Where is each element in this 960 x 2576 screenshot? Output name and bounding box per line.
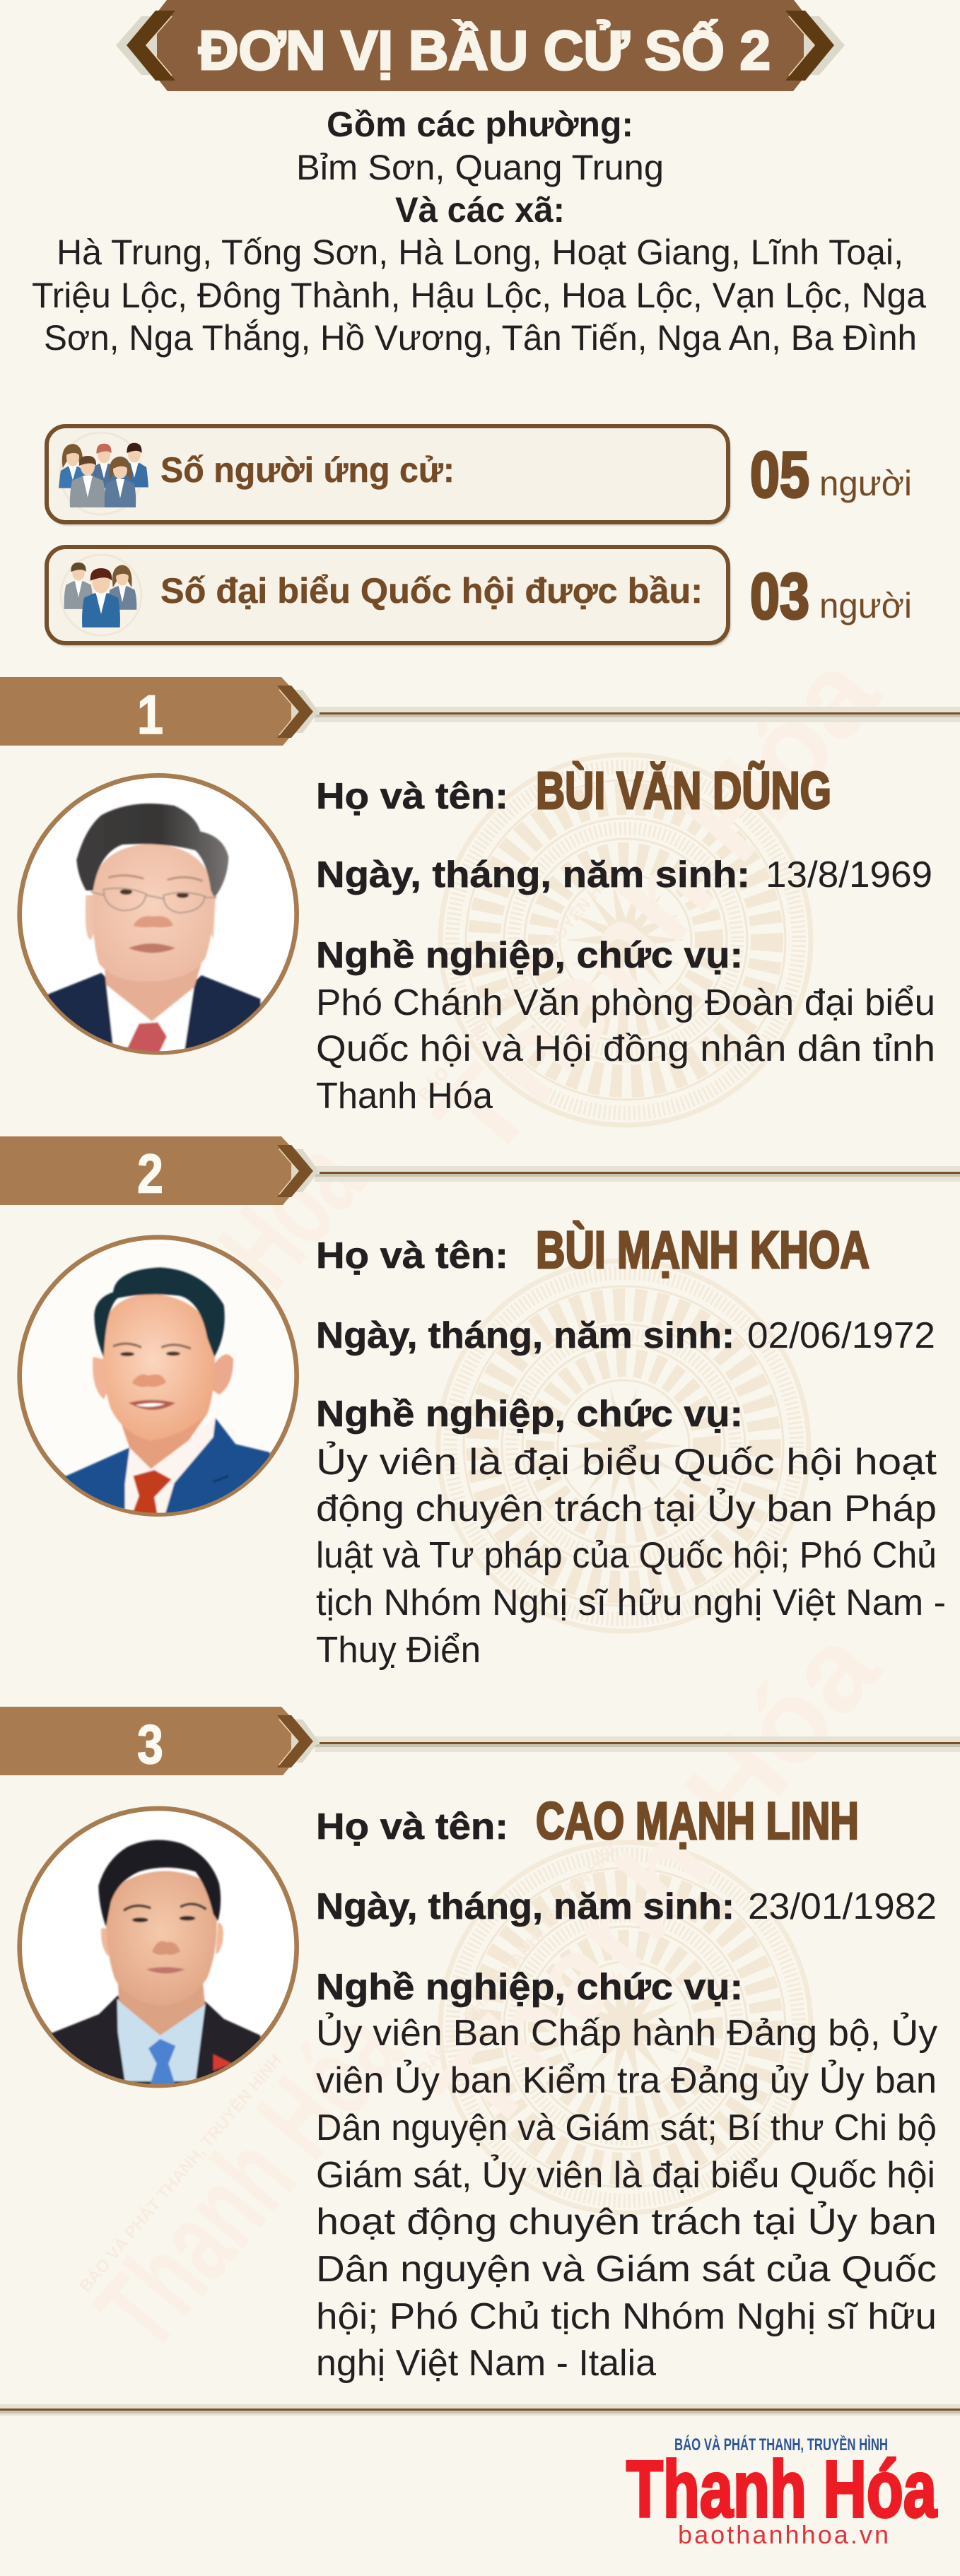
candidate 1 occupation: Phó Chánh Văn phòng Đoàn đại biểu [316,982,935,1023]
text block: candidate 1 details [316,761,935,1117]
section marker 1 [0,677,960,746]
section marker 2 [0,1136,960,1205]
candidate 3 occupation [316,1967,937,2384]
candidate 3 occupation: Dân nguyện và Giám sát; Bí thư Chi bộ [316,2107,937,2148]
candidate 1 name [316,761,831,820]
candidate 1 occupation [316,935,935,1117]
icon: group of five people [59,433,148,514]
watermark: Thanh Hóa 1: Thanh Hóa [410,629,903,1181]
candidate 2 occupation [316,1394,946,1671]
candidate 3 occupation: Giám sát, Ủy viên là đại biểu Quốc hội [316,2154,935,2196]
text block: constituency wards and communes: Sơn, Nga Thắng, Hồ Vương, Tân Tiến, Nga An, Ba Đình [44,318,917,358]
watermark: Thanh Hóa 4 [71,1985,426,2372]
watermark: bronze drum 2 [438,1261,809,1631]
candidate 3 name: CAO MẠNH LINH [536,1792,859,1850]
portrait: Bùi Văn Dũng [20,775,297,1060]
heading: title text: ĐƠN VỊ BẦU CỬ SỐ 2 [199,19,771,81]
candidate 2 date of birth [316,1315,935,1356]
candidate 1 occupation: Quốc hội và Hội đồng nhân dân tỉnh [316,1028,935,1069]
candidate 3 occupation: hội; Phó Chủ tịch Nhóm Nghị sĩ hữu [316,2296,937,2337]
text block: constituency wards and communes [32,105,926,358]
candidate 2 date of birth: 02/06/1972 [747,1315,935,1356]
watermark: Thanh Hóa 4: Thanh Hóa [71,1986,426,2372]
watermark: Thanh Hóa 2: Thanh Hóa [410,1604,903,2156]
panel: number of candidates [47,426,730,525]
candidate 3 date of birth [316,1886,937,1927]
candidate 3 occupation: Nghề nghiệp, chức vụ: [316,1967,743,2008]
logo: Báo và Phát thanh, Truyền hình Thanh Hóa: baothanhhoa.vn [678,2520,889,2549]
text block: constituency wards and communes: Triệu Lộc, Đông Thành, Hậu Lộc, Hoa Lộc, Vạn Lộc, Nga [32,276,926,315]
candidate 1 name: BÙI VĂN DŨNG [536,761,831,820]
candidate 2 occupation: tịch Nhóm Nghị sĩ hữu nghị Việt Nam - [316,1582,946,1623]
candidate 2 occupation: Ủy viên là đại biểu Quốc hội hoạt [316,1441,937,1483]
candidate 3 name [316,1792,859,1850]
text block: constituency wards and communes: Bỉm Sơn, Quang Trung [296,148,664,187]
candidate 3 occupation: viên Ủy ban Kiểm tra Đảng ủy Ủy ban [316,2059,937,2101]
candidate 1 date of birth: 13/8/1969 [766,854,932,895]
candidate 1 occupation: Nghề nghiệp, chức vụ: [316,935,743,976]
candidate 2 occupation: Nghề nghiệp, chức vụ: [316,1394,743,1435]
candidate 2 name: Họ và tên: [316,1235,508,1276]
watermark: Thanh Hóa 1: BÁO VÀ PHÁT THANH, TRUYỀN HÌNH [414,859,624,1105]
candidate 2 name: BÙI MẠNH KHOA [536,1221,870,1279]
candidate 2 occupation: động chuyên trách tại Ủy ban Pháp [316,1488,937,1529]
candidate 3 name: Họ và tên: [316,1806,508,1847]
watermark: bronze drum 1 [440,755,811,1125]
candidate 2 occupation: Thuỵ Điển [316,1630,481,1671]
label: number of deputies: Số đại biểu Quốc hội được bầu: [160,571,703,611]
portrait: Bùi Mạnh Khoa [20,1237,297,1522]
watermark: bronze drum 3 [440,1842,811,2213]
value: 03 deputies: người [819,586,912,625]
text block: constituency wards and communes: Gồm các phường: [327,105,633,144]
watermark: Thanh Hóa 3: Thanh Hóa [33,1116,387,1502]
icon: group of three people [61,555,141,635]
panel: number of deputies to elect [47,547,730,646]
value: 05 candidates: người [819,464,912,503]
candidate 2 date of birth: Ngày, tháng, năm sinh: [316,1315,734,1356]
candidate 3 date of birth: Ngày, tháng, năm sinh: [316,1886,734,1927]
candidate 3 occupation: Dân nguyện và Giám sát của Quốc [316,2249,937,2290]
candidate 1 name: Họ và tên: [316,776,508,817]
candidate 3 occupation: nghị Việt Nam - Italia [316,2343,656,2384]
title banner [116,0,845,91]
candidate 1 date of birth [316,854,932,895]
candidate 3 date of birth: 23/01/1982 [748,1886,937,1927]
watermark: Thanh Hóa 4: BÁO VÀ PHÁT THANH, TRUYỀN HÌNH [76,2051,286,2296]
value: 03 deputies: 03 [750,560,809,633]
portrait: Cao Mạnh Linh [20,1809,297,2093]
watermark: Thanh Hóa 2: BÁO VÀ PHÁT THANH, TRUYỀN HÌNH [414,1834,624,2079]
text block: candidate 2 details [316,1221,946,1671]
candidate 3 occupation: Ủy viên Ban Chấp hành Đảng bộ, Ủy [316,2012,937,2054]
text block: constituency wards and communes: Và các xã: [395,190,565,230]
section number 2: 2 [137,1142,163,1204]
value: 05 candidates: 05 [750,439,809,511]
candidate 3 occupation: hoạt động chuyên trách tại Ủy ban [316,2201,937,2242]
candidate 1 date of birth: Ngày, tháng, năm sinh: [316,854,750,895]
section number 3: 3 [137,1713,163,1775]
value: 03 deputies [750,560,912,633]
text block: candidate 3 details [316,1792,937,2384]
candidate 2 name [316,1221,870,1279]
value: 05 candidates [750,439,912,511]
section marker 3 [0,1707,960,1775]
label: number of candidates: Số người ứng cử: [160,450,455,490]
candidate 2 occupation: luật và Tư pháp của Quốc hội; Phó Chủ [316,1535,937,1576]
text block: constituency wards and communes: Hà Trung, Tống Sơn, Hà Long, Hoạt Giang, Lĩnh Toại, [57,233,903,272]
section number 1: 1 [137,683,163,746]
candidate 1 occupation: Thanh Hóa [316,1076,493,1117]
